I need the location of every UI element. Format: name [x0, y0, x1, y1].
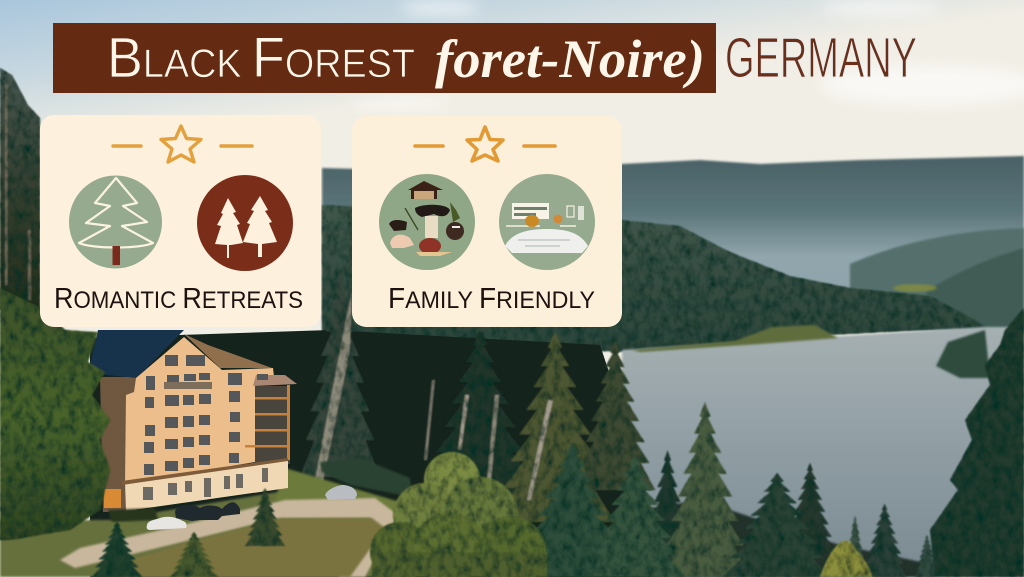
ground floor [125, 460, 288, 511]
forest trunks and mid trees [300, 272, 655, 522]
tower roof [253, 375, 297, 386]
forested hill [322, 205, 985, 352]
label: ROMANTIC RETREATS [54, 283, 303, 315]
parked cars [147, 485, 357, 530]
hedge [320, 458, 412, 497]
hotel [88, 330, 297, 512]
dark cars [175, 502, 240, 521]
entrance [104, 489, 121, 508]
title script text: foret-Noire) [435, 29, 705, 89]
hotel windows [143, 355, 268, 500]
bottom meadow [0, 490, 405, 577]
hotel side wall [100, 377, 136, 512]
icon: fir outline [69, 176, 162, 268]
lake island shore [632, 325, 838, 352]
icon: hotel room [499, 174, 595, 270]
hotel blue roof [88, 330, 184, 378]
title bar [53, 23, 716, 93]
clouds [350, 1, 1024, 108]
autumn foliage on hill [893, 284, 937, 292]
hotel tower [255, 386, 290, 464]
far right shore trees [936, 330, 990, 378]
icon: family scene [379, 174, 475, 270]
icon: star rating [415, 127, 555, 161]
left background pine [0, 68, 40, 310]
icon: twin firs [197, 175, 293, 271]
central dark forest [90, 330, 650, 577]
country label: GERMANY [725, 26, 917, 90]
lake [622, 327, 1024, 577]
panel: romantic retreats [40, 115, 321, 327]
hotel string course [122, 458, 288, 485]
hotel brown roof [184, 334, 272, 368]
lawn [275, 468, 410, 525]
foreground fir cluster [515, 443, 685, 577]
title text: BLACK FOREST [107, 26, 415, 90]
far mountain ridge [322, 156, 1024, 330]
treeline mass along the lake [640, 500, 935, 577]
foreground broadleaf tree [370, 452, 547, 577]
white car [147, 517, 187, 530]
central grass patch [115, 518, 385, 577]
left large green tree [0, 288, 110, 540]
distant right hills [850, 228, 1024, 330]
hedge by hotel [108, 508, 158, 522]
hotel facade [125, 337, 275, 484]
silver car [325, 485, 357, 500]
label: FAMILY FRIENDLY [388, 283, 595, 315]
right foreground fir trees [640, 308, 1024, 577]
small foreground firs [92, 488, 285, 577]
panel: family friendly [352, 116, 622, 327]
icon: star rating [113, 126, 252, 162]
road [60, 498, 398, 577]
